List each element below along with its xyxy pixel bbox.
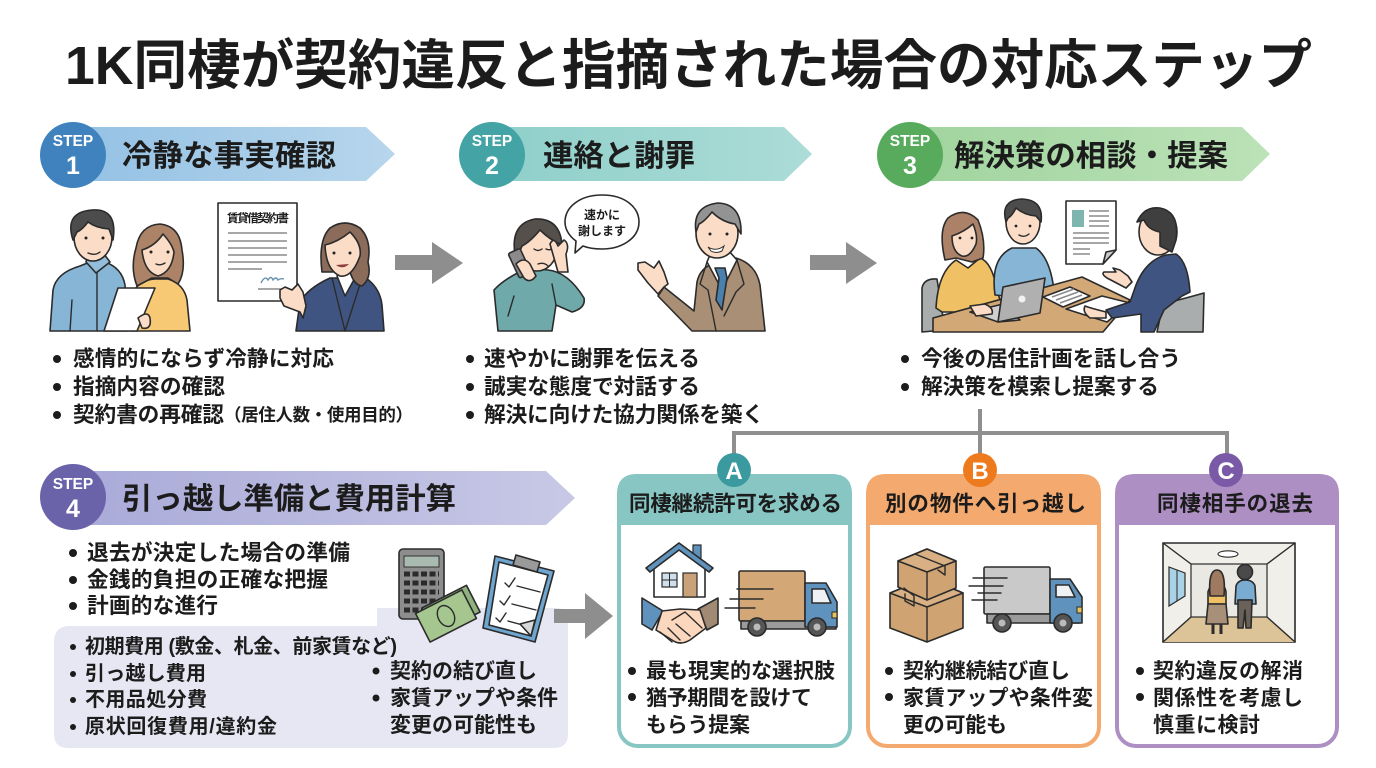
- heading: step 3: STEP: [890, 133, 930, 150]
- text block: step 1 bullets: 契約書の再確認: [73, 402, 224, 427]
- text block: step 3 bullets: 解決策を模索し提案する: [921, 374, 1159, 399]
- text block: option A bullets: 猶予期間を設けて: [646, 687, 812, 710]
- panel: cost details: 契約の結び直し: [390, 660, 537, 683]
- card: option B: [866, 453, 1101, 746]
- text block: option A bullets: [628, 660, 835, 737]
- connector: step 3 to options: [734, 409, 1227, 456]
- illustration: apologising by phone to landlord: 謝します: [578, 223, 626, 238]
- text block: step 4 bullets: 退去が決定した場合の準備: [87, 540, 350, 565]
- text block: step 4 bullets: [69, 540, 350, 618]
- text block: step 2 bullets: 速やかに謝罪を伝える: [484, 346, 700, 371]
- badge A: [717, 453, 751, 487]
- heading: step 4: [40, 464, 575, 530]
- text block: option C bullets: [1136, 660, 1303, 737]
- badge A: A: [725, 458, 743, 485]
- icon: calculator: [399, 549, 444, 619]
- title: 1K同棲が契約違反と指摘された場合の対応ステップ: [65, 36, 1312, 96]
- badge C: [1209, 453, 1243, 487]
- icon: delivery truck: [725, 571, 837, 636]
- panel: step 2: [459, 122, 812, 427]
- illustration: couple checking contract with agent: 賃貸借契約書: [227, 211, 289, 225]
- heading: step 2: [459, 122, 812, 188]
- card heading B: 別の物件へ引っ越し: [885, 492, 1086, 516]
- text block: step 2 bullets: 誠実な態度で対話する: [484, 374, 700, 399]
- arrow: step 2 to step 3: [810, 242, 877, 284]
- text block: option C bullets: 契約違反の解消: [1153, 660, 1303, 683]
- card heading C: 同棲相手の退去: [1157, 492, 1313, 516]
- panel: cost details: 不用品処分費: [85, 688, 207, 711]
- text block: option A bullets: 最も現実的な選択肢: [646, 660, 835, 683]
- heading: step 1: [40, 122, 395, 188]
- text block: option B bullets: 家賃アップや条件変: [903, 687, 1093, 710]
- heading: step 3: [877, 122, 1270, 188]
- panel: cost details: 初期費用 (敷金、札金、前家賃など): [85, 634, 397, 658]
- illustration: discussion at a table: [922, 199, 1204, 332]
- badge C: C: [1217, 458, 1235, 485]
- panel: cost details: 変更の可能性も: [390, 714, 537, 737]
- heading: step 4: 引っ越し準備と費用計算: [122, 482, 456, 516]
- heading: step 1: STEP: [53, 133, 93, 150]
- card: option A: [617, 453, 852, 746]
- arrow: step 1 to step 2: [395, 242, 463, 284]
- heading: step 4: 4: [66, 495, 80, 523]
- heading: step 3: 解決策の相談・提案: [954, 139, 1228, 173]
- text block: option C bullets: 関係性を考慮し: [1153, 687, 1303, 710]
- illustration: couple checking contract with agent: [50, 203, 384, 331]
- heading: step 4: STEP: [53, 476, 93, 493]
- heading: step 3: 3: [903, 152, 917, 180]
- text block: option A bullets: もらう提案: [646, 714, 750, 737]
- badge B: [963, 453, 997, 487]
- text block: step 1 bullets: 指摘内容の確認: [73, 374, 225, 399]
- panel: step 3: [877, 122, 1270, 399]
- illustration: empty room with two people: [1163, 543, 1295, 642]
- icon: house and handshake: [642, 543, 718, 643]
- heading: step 1: 冷静な事実確認: [122, 139, 336, 173]
- text block: step 1 bullets: （居住人数・使用目的）: [224, 405, 413, 425]
- panel: cost details: 原状回復費用/違約金: [85, 715, 277, 738]
- text block: option B bullets: [885, 660, 1093, 737]
- heading: step 1: 1: [66, 152, 80, 180]
- heading: step 2: 連絡と謝罪: [543, 139, 695, 173]
- text block: step 2 bullets: [466, 346, 764, 427]
- text block: option C bullets: 慎重に検討: [1153, 714, 1260, 737]
- heading: step 2: STEP: [472, 133, 512, 150]
- text block: step 1 bullets: 感情的にならず冷静に対応: [73, 346, 334, 371]
- illustration: apologising by phone to landlord: [494, 195, 765, 331]
- text block: step 2 bullets: 解決に向けた協力関係を築く: [484, 402, 764, 427]
- illustration: apologising by phone to landlord: 速かに: [584, 207, 620, 222]
- panel: step 1: [40, 122, 413, 427]
- panel: cost details: 引っ越し費用: [85, 662, 206, 685]
- icon: clipboard checklist: [483, 555, 554, 642]
- text block: step 3 bullets: 今後の居住計画を話し合う: [921, 346, 1181, 371]
- arrow: step 4 to options: [554, 593, 613, 639]
- text block: step 4 bullets: 金銭的負担の正確な把握: [87, 567, 328, 592]
- panel: step 4: [40, 464, 575, 748]
- text block: option B bullets: 更の可能も: [903, 714, 1007, 737]
- panel: cost details: 家賃アップや条件: [390, 687, 558, 710]
- card heading A: 同棲継続許可を求める: [629, 492, 842, 516]
- panel: cost details: [54, 608, 568, 748]
- icon: cardboard boxes: [890, 549, 963, 642]
- card: option C: [1115, 453, 1339, 746]
- badge B: B: [971, 458, 989, 485]
- text block: step 3 bullets: [901, 346, 1181, 399]
- text block: option B bullets: 契約継続結び直し: [903, 660, 1070, 683]
- text block: step 4 bullets: 計画的な進行: [87, 593, 218, 618]
- icon: moving truck: [969, 567, 1082, 632]
- heading: step 2: 2: [485, 152, 499, 180]
- icon: banknotes: [416, 585, 480, 642]
- text block: step 1 bullets: [53, 346, 413, 427]
